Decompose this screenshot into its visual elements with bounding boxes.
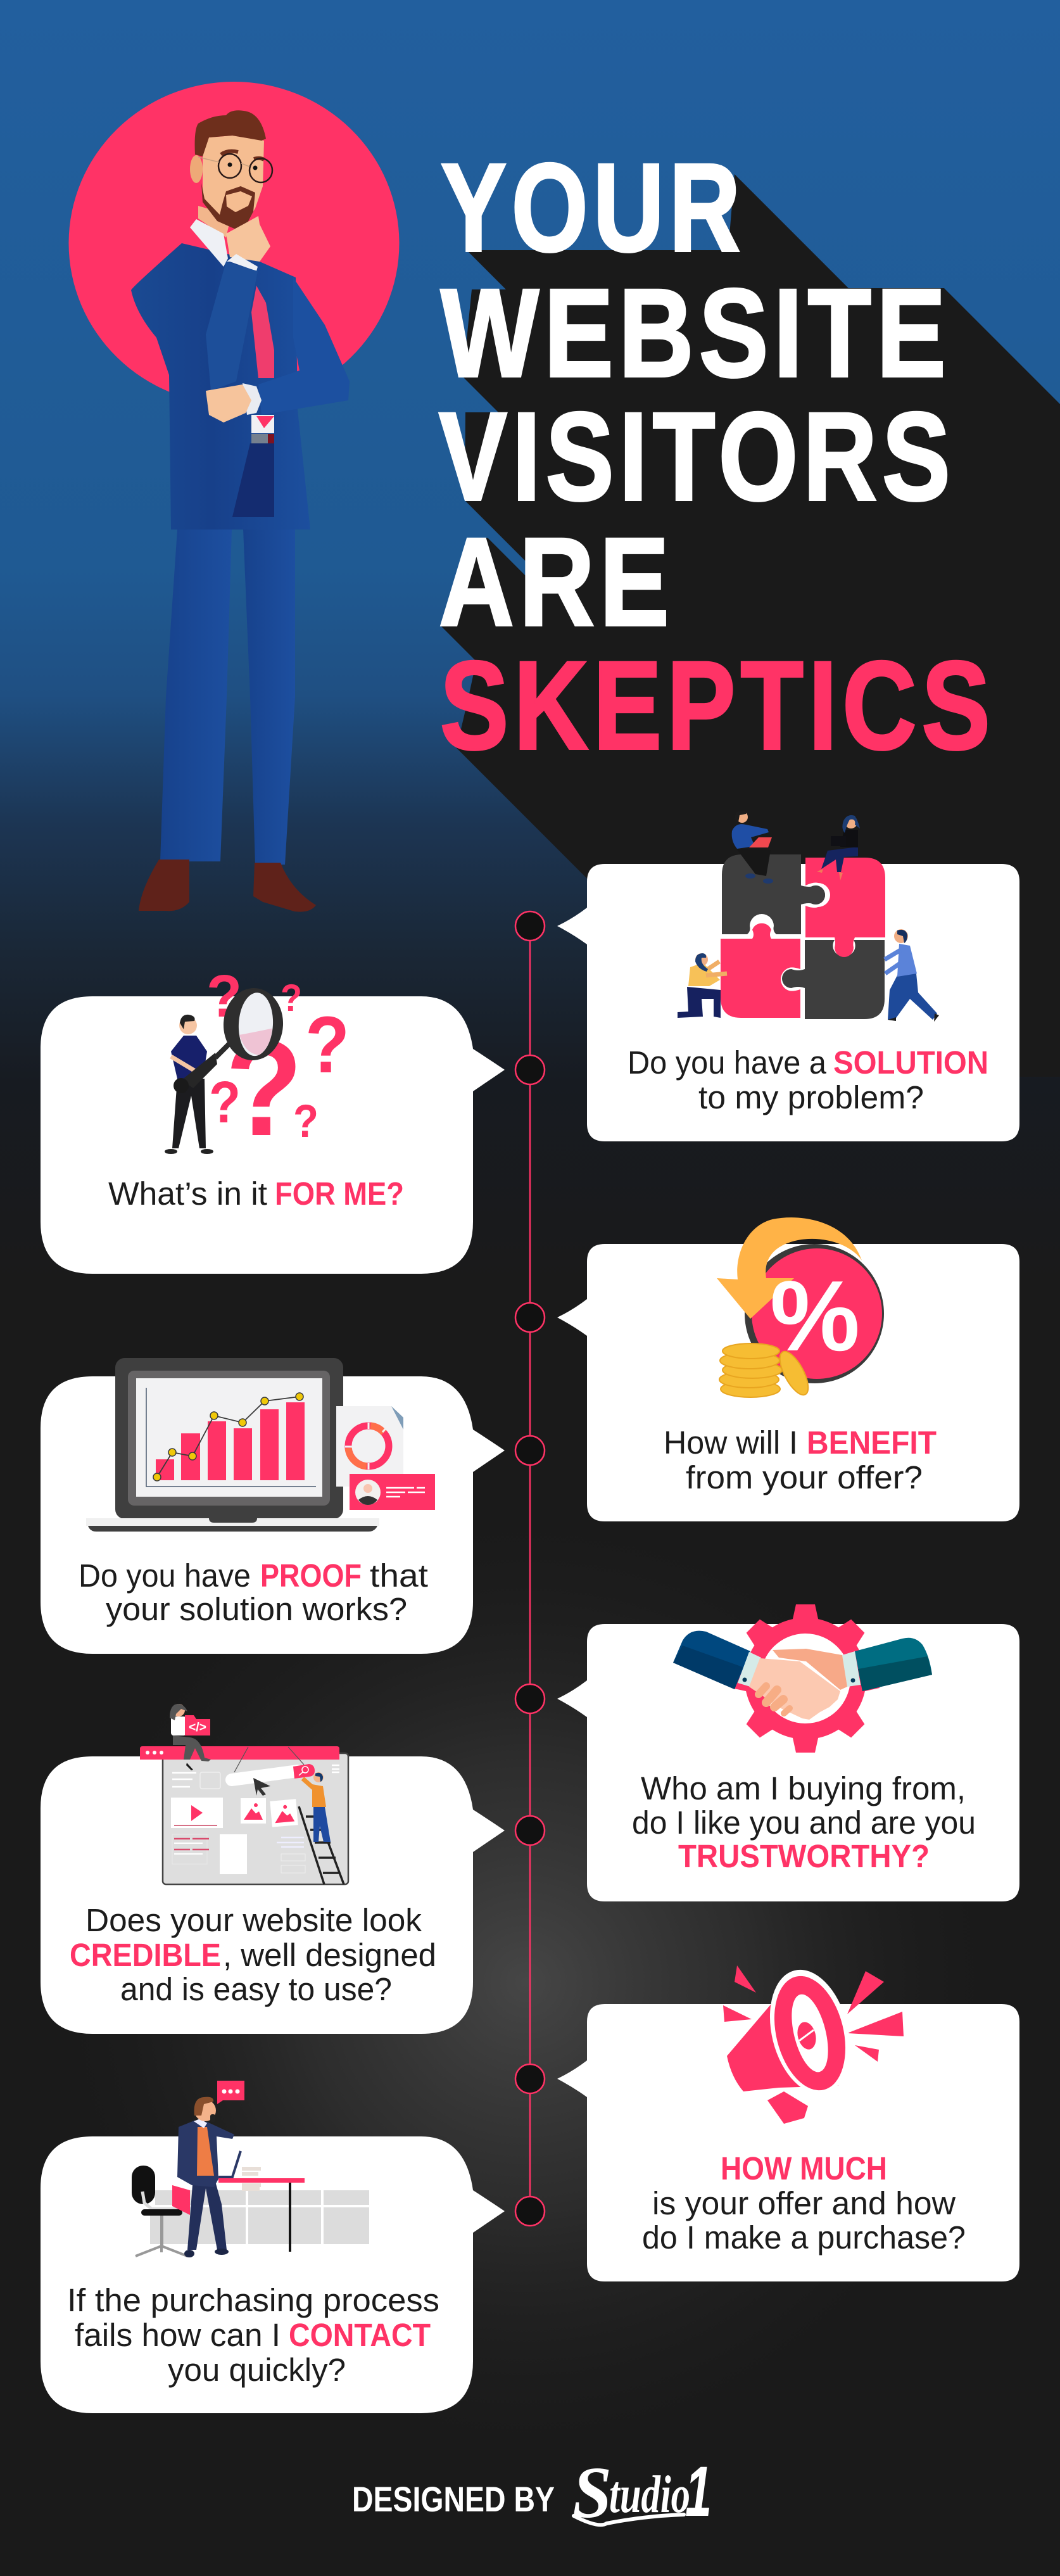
footer credit xyxy=(352,2452,712,2534)
question text: your solution works? xyxy=(106,1591,407,1627)
man xyxy=(172,2097,234,2257)
question text: HOW MUCH xyxy=(721,2150,887,2186)
pink circle behind man xyxy=(68,82,399,405)
jacket xyxy=(131,243,310,530)
question text: How will I xyxy=(664,1424,798,1461)
ladder xyxy=(299,1806,344,1884)
question text xyxy=(642,2150,966,2256)
icon: magnifier with question marks: ? xyxy=(206,963,242,1030)
wall grid xyxy=(150,2190,369,2244)
question text: Do you have a xyxy=(628,1044,827,1081)
title: VISITORS xyxy=(439,386,956,526)
icon: magnifier with question marks: ? xyxy=(293,1096,319,1147)
question text: CREDIBLE xyxy=(70,1937,221,1973)
question text: If the purchasing process xyxy=(67,2282,439,2318)
question text: you quickly? xyxy=(168,2352,346,2388)
person pushing right xyxy=(885,929,939,1022)
bars xyxy=(156,1402,305,1480)
desk xyxy=(218,2151,305,2252)
icon: megaphone xyxy=(723,1961,904,2124)
cuffs xyxy=(738,1651,861,1687)
speech card xyxy=(41,2136,505,2413)
panel: trustworthy xyxy=(557,1604,1019,1901)
raised forearm xyxy=(206,262,258,391)
panel: credible xyxy=(41,1704,505,2034)
legs xyxy=(160,530,295,865)
panel: contact xyxy=(41,2081,505,2413)
briefcase xyxy=(172,2185,190,2215)
speech card xyxy=(557,2004,1019,2281)
trend line xyxy=(153,1393,303,1481)
speech card xyxy=(41,996,505,1274)
title xyxy=(439,137,995,775)
speech card xyxy=(557,1624,1019,1901)
question text xyxy=(628,1044,988,1115)
cursor xyxy=(253,1778,270,1796)
hands xyxy=(749,1649,847,1720)
panel: proof xyxy=(41,1358,505,1654)
chin hand and cuff xyxy=(226,216,270,271)
question text: TRUSTWORTHY? xyxy=(678,1838,930,1874)
profile card xyxy=(350,1474,435,1510)
panel: for me xyxy=(41,963,505,1274)
panel: how much xyxy=(557,1961,1019,2281)
question text: and is easy to use? xyxy=(120,1971,392,2007)
panel: solution xyxy=(557,811,1019,1141)
shirt, tie and belt xyxy=(232,286,274,517)
question text: SOLUTION xyxy=(833,1044,988,1081)
icon: laptop with bar chart xyxy=(86,1358,435,1532)
question text: that xyxy=(370,1558,428,1594)
icon: puzzle with people xyxy=(678,811,939,1022)
logo xyxy=(572,2452,712,2534)
question text: is your offer and how xyxy=(652,2185,956,2221)
question text xyxy=(70,1902,436,2007)
speech card xyxy=(557,1244,1019,1521)
panel: benefit xyxy=(557,1217,1019,1521)
icon: man on phone at desk xyxy=(132,2081,369,2257)
logo: tudio xyxy=(609,2465,690,2524)
icon: percent badge with arrow and coins: % xyxy=(770,1260,860,1372)
icon: percent badge with arrow and coins xyxy=(717,1217,884,1399)
person sitting on bar xyxy=(170,1704,211,1770)
question text: from your offer? xyxy=(686,1459,923,1495)
question text: BENEFIT xyxy=(807,1424,937,1461)
person top right xyxy=(817,815,860,880)
question text xyxy=(79,1558,428,1627)
question text xyxy=(664,1424,937,1495)
question text: FOR ME? xyxy=(275,1176,404,1212)
title: WEBSITE xyxy=(441,263,951,403)
rays xyxy=(723,1965,904,2062)
shoes xyxy=(139,860,316,912)
neck and collar xyxy=(190,206,231,267)
question text xyxy=(67,2282,439,2388)
footer credit: DESIGNED BY xyxy=(352,2479,555,2519)
question text: PROOF xyxy=(260,1558,362,1594)
folded arm sleeve xyxy=(258,277,350,415)
text blocks xyxy=(172,1834,305,1874)
coins xyxy=(719,1343,814,1399)
title: ARE xyxy=(439,512,674,652)
logo: 1 xyxy=(685,2452,712,2531)
cuff and fist xyxy=(206,383,262,422)
question text: do I like you and are you xyxy=(632,1805,976,1841)
code folder: </> xyxy=(189,1721,206,1734)
speech card xyxy=(41,1376,505,1654)
glasses xyxy=(198,154,272,182)
icon: magnifier with question marks xyxy=(165,963,350,1164)
person top left xyxy=(732,811,773,884)
timeline xyxy=(515,911,545,2226)
person on ladder xyxy=(303,1772,331,1842)
icon: website being built xyxy=(140,1704,348,1884)
question text: Do you have xyxy=(79,1558,251,1594)
chair xyxy=(132,2166,187,2256)
icon: magnifier with question marks: ? xyxy=(209,1069,241,1135)
question text xyxy=(632,1770,976,1874)
question text: do I make a purchase? xyxy=(642,2219,966,2256)
question text: fails how can I xyxy=(75,2317,281,2353)
magnifying glass xyxy=(222,987,285,1062)
logo: S xyxy=(572,2452,612,2534)
speech card xyxy=(557,864,1019,1141)
question text: What’s in it xyxy=(108,1176,267,1212)
icon: magnifier with question marks: ? xyxy=(225,1012,303,1164)
title: YOUR xyxy=(441,137,745,277)
browser bar xyxy=(140,1746,339,1760)
sleeves xyxy=(673,1631,932,1691)
question text: Does your website look xyxy=(85,1902,422,1938)
person kneeling left xyxy=(678,953,727,1018)
search bar xyxy=(232,1747,315,1780)
image tiles xyxy=(241,1798,298,1827)
icon: magnifier with question marks: ? xyxy=(281,977,302,1019)
icon: magnifier with question marks: ? xyxy=(305,1000,350,1089)
speech bubble xyxy=(217,2081,244,2104)
long shadow behind title xyxy=(441,174,1060,1077)
question text: Who am I buying from, xyxy=(641,1770,966,1806)
menu marks xyxy=(172,1765,339,1787)
question text: , well designed xyxy=(223,1937,436,1973)
question text: CONTACT xyxy=(289,2317,431,2353)
icon: handshake with gear xyxy=(673,1604,932,1753)
question text xyxy=(108,1176,404,1212)
speech card xyxy=(41,1756,505,2034)
question text: to my problem? xyxy=(698,1079,924,1115)
head xyxy=(190,110,266,231)
person holding magnifier xyxy=(165,1015,229,1154)
video player xyxy=(171,1798,223,1828)
document with donut chart xyxy=(336,1406,403,1487)
illustration: thinking businessman xyxy=(131,110,350,912)
